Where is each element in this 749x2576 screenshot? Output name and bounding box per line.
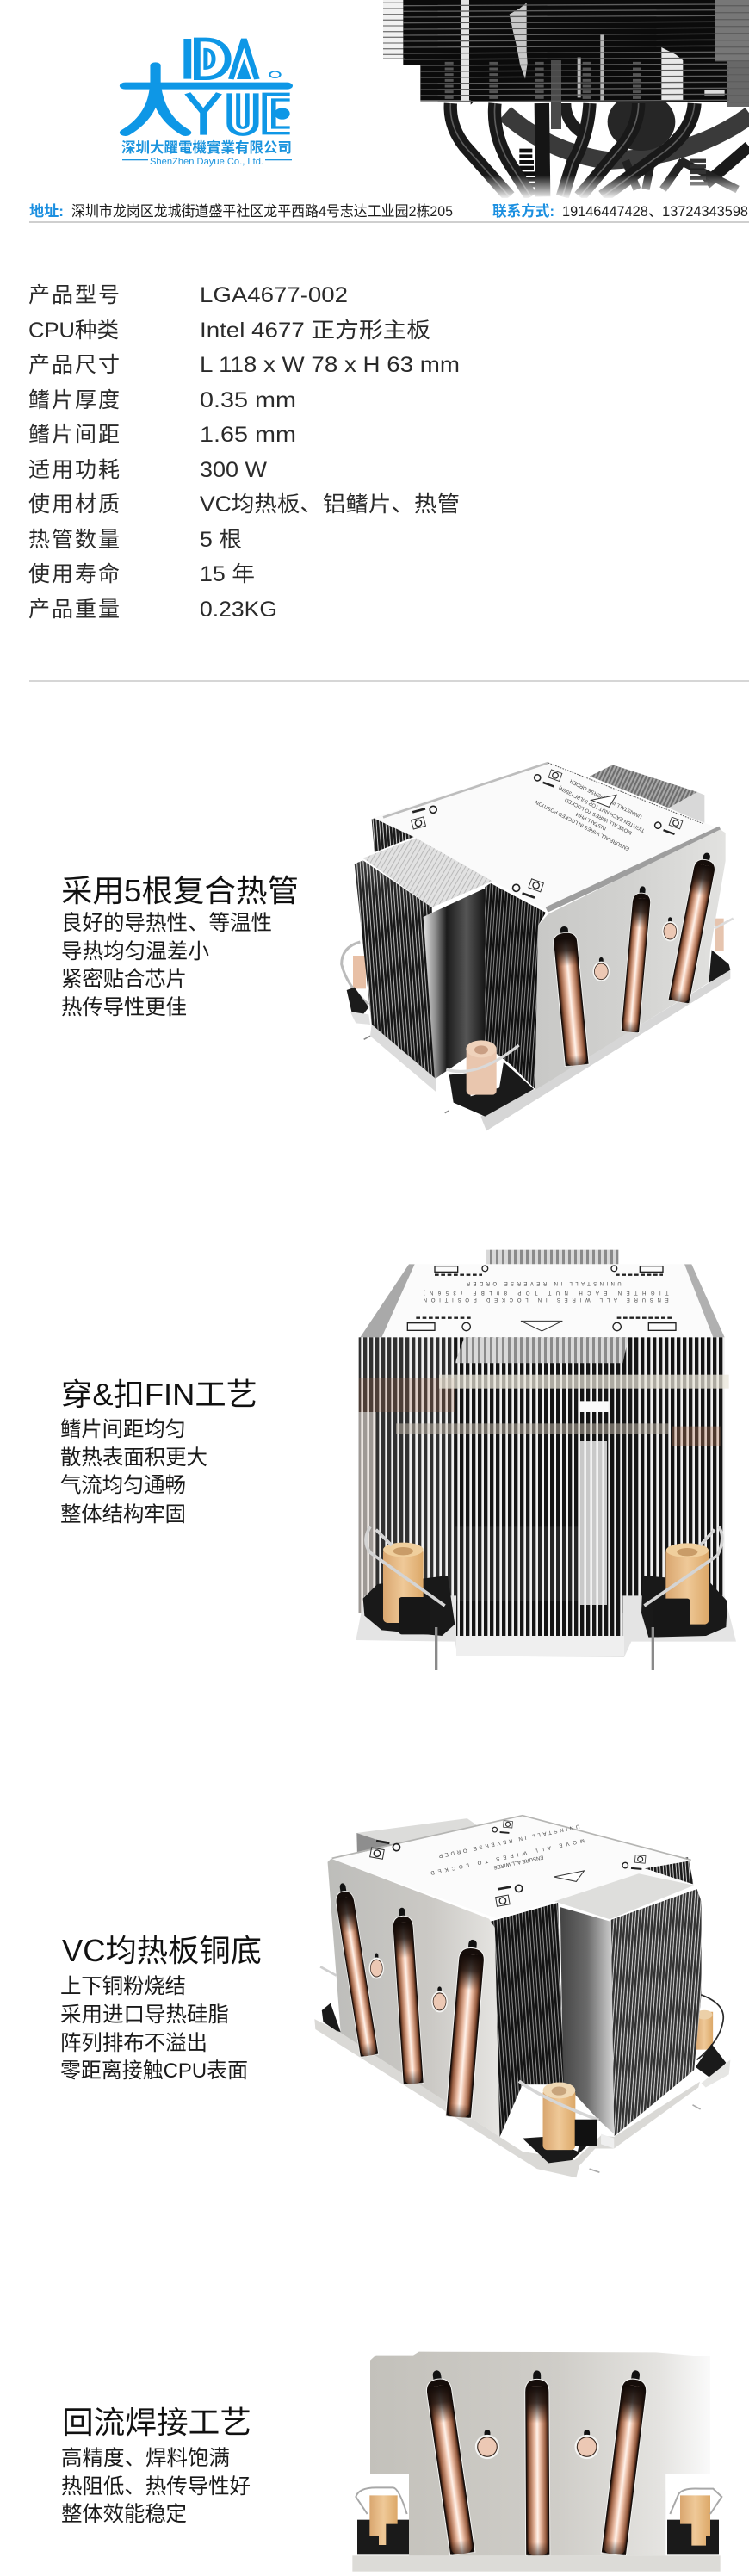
front clip with post <box>519 2081 701 2172</box>
spec values: LGA4677-002 <box>200 283 348 307</box>
section 1 text: composite heat pipes <box>61 873 299 1019</box>
right clip with post <box>641 1526 727 1670</box>
spec values: 300 W <box>200 458 267 482</box>
spec labels: 热管数量 <box>28 528 120 552</box>
base plate <box>356 1595 736 1657</box>
right fin top <box>554 1873 694 1919</box>
channel <box>560 1907 614 2134</box>
spec labels: CPU种类 <box>28 319 119 343</box>
left rear clip <box>320 1966 341 2032</box>
left clip with post <box>363 1526 455 1670</box>
rear fins <box>372 765 704 852</box>
rear right clip <box>709 919 734 983</box>
rear left clip <box>342 942 370 1025</box>
spec values: 5 根 <box>200 528 242 552</box>
spec labels <box>28 283 120 622</box>
label text: UNINSTALL IN REVERSE ORDER <box>437 1823 580 1859</box>
mounting holes <box>592 917 678 981</box>
bullet lines: 整体效能稳定 <box>61 2502 187 2526</box>
product image 3: heatsink base view <box>314 1816 730 2177</box>
label text: INSTALL PHM <box>575 811 607 831</box>
right clip with post <box>665 2474 721 2554</box>
silver side face <box>328 1859 500 2137</box>
bullet lines: 高精度、焊料饱满 <box>61 2446 230 2470</box>
label text: ENSURE ALL WIRES IN LOCKED POSITION <box>424 1297 669 1302</box>
label text <box>426 1823 586 1884</box>
heading: 穿&扣FIN工艺 <box>61 1377 257 1412</box>
right fin block <box>610 1889 702 2136</box>
label text: TIGHTEN EACH NUT TOP 80LBF (356N) <box>424 1290 669 1295</box>
logo english name: ShenZhen Dayue Co., Ltd. <box>150 157 263 167</box>
spec labels: 产品尺寸 <box>28 353 120 377</box>
base plate <box>370 970 730 1130</box>
product image 2: heatsink front view <box>356 1250 736 1670</box>
bullet lines: 鳍片间距均匀 <box>60 1417 186 1441</box>
top label plate <box>332 1816 694 1919</box>
label text: UNINSTALL IN REVERSE ORDER <box>569 777 643 819</box>
silver side plate <box>370 2352 710 2555</box>
bullet lines: 良好的导热性、等温性 <box>61 911 272 935</box>
label text: MOVE ALL WIRES TO LOCKED <box>564 796 633 835</box>
right rear post <box>696 1994 730 2088</box>
spec labels: 产品重量 <box>28 598 120 622</box>
spec labels: 鳍片厚度 <box>28 388 120 412</box>
header photo: black cooler with heat pipes <box>379 0 749 204</box>
logo mark <box>126 39 290 135</box>
bullet lines: 零距离接触CPU表面 <box>60 2059 248 2083</box>
spec values: Intel 4677 正方形主板 <box>200 319 430 343</box>
heading: 采用5根复合热管 <box>61 873 299 908</box>
section 3 text: VC vapor chamber <box>60 1933 262 2083</box>
base plate <box>352 2555 721 2572</box>
contact bar: 深圳市龙岗区龙城街道盛平社区龙平西路4号志达工业园2栋205 <box>71 203 453 220</box>
heading: 回流焊接工艺 <box>62 2405 251 2440</box>
bullet lines: 气流均匀通畅 <box>60 1473 186 1497</box>
label text: ENSURE ALL WIRES <box>493 1854 544 1870</box>
bullet lines <box>61 911 272 1019</box>
base plate <box>314 2019 700 2177</box>
contact bar <box>29 202 749 223</box>
rear fins <box>486 1250 618 1264</box>
bullet lines: 上下铜粉烧结 <box>60 1974 186 1998</box>
spec labels: 产品型号 <box>28 283 120 307</box>
top label plate <box>360 1264 725 1337</box>
label text <box>424 1280 669 1302</box>
centre fin block <box>455 1363 622 1636</box>
address: 地址: <box>29 203 64 220</box>
heat pipes <box>333 1882 486 2118</box>
heat pipes <box>552 851 718 1067</box>
bullet lines: 采用进口导热硅脂 <box>60 2003 229 2027</box>
spec values: 0.35 mm <box>200 388 296 412</box>
middle fin block <box>485 883 546 1089</box>
silver side face <box>535 829 726 1090</box>
bullet lines: 紧密贴合芯片 <box>61 967 187 991</box>
channel between fin blocks <box>424 889 485 1079</box>
spec values: 1.65 mm <box>200 423 296 447</box>
spec values: 15 年 <box>200 562 255 586</box>
bullet lines: 热传导性更佳 <box>61 995 187 1019</box>
label text: ENSURE ALL WIRES IN LOCKED POSITION <box>535 799 631 851</box>
spec values: L 118 x W 78 x H 63 mm <box>200 353 460 377</box>
logo company name: 深圳大躍電機實業有限公司 <box>121 139 292 156</box>
product image 1: heatsink three quarter view <box>342 762 734 1130</box>
logo: DA YUE <box>121 39 292 167</box>
spec table <box>28 283 460 622</box>
bullet lines: 导热均匀温差小 <box>61 939 209 963</box>
contact: 联系方式: <box>492 202 554 220</box>
label text: MOVE ALL WIRES TO LOCKED <box>430 1837 585 1876</box>
bullet lines <box>60 1417 207 1526</box>
heat pipes <box>424 2369 649 2556</box>
bullet lines: 热阻低、热传导性好 <box>61 2474 251 2499</box>
middle fin block <box>490 1903 564 2137</box>
spec values <box>200 283 460 622</box>
bullet lines: 整体结构牢固 <box>60 1502 186 1526</box>
section 4 text: reflow soldering <box>61 2405 251 2526</box>
bullet lines <box>60 1974 248 2083</box>
spec labels: 鳍片间距 <box>28 423 120 447</box>
spec labels: 适用功耗 <box>28 458 120 482</box>
bullet lines: 散热表面积更大 <box>60 1446 207 1470</box>
centre fin top <box>455 1337 628 1363</box>
spec labels: 使用寿命 <box>28 562 120 586</box>
mounting holes <box>369 1953 448 2012</box>
front clip with post <box>364 1036 534 1117</box>
heading: VC均热板铜底 <box>62 1933 262 1968</box>
outer fins <box>359 1337 725 1613</box>
mounting holes <box>475 2430 599 2459</box>
bullet lines: 阵列排布不溢出 <box>60 2031 207 2055</box>
left clip with post <box>356 2474 409 2554</box>
label text: TIGHTEN EACH NUT TOP 80LBF (356N) <box>558 784 646 833</box>
spec labels: 使用材质 <box>28 492 120 517</box>
front fin top <box>363 838 492 907</box>
bullet lines <box>61 2446 251 2526</box>
spec values: VC均热板、铝鳍片、热管 <box>200 492 460 517</box>
label text: UNINSTALL IN REVERSE ORDER <box>466 1280 622 1285</box>
label text <box>535 768 651 853</box>
reflection bands <box>396 1375 729 1605</box>
section 2 text: FIN process <box>60 1377 257 1526</box>
rear fins <box>356 1818 693 1885</box>
top label plate <box>373 762 721 910</box>
spec values: 0.23KG <box>200 598 277 622</box>
left fin block <box>355 860 435 1079</box>
product image 4: heatsink side view <box>352 2352 721 2572</box>
